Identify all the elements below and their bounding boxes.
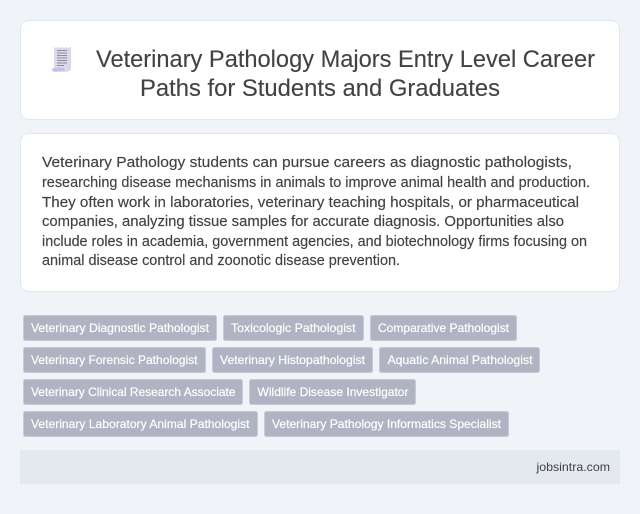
tag: Veterinary Clinical Research Associate: Veterinary Clinical Research Associate: [31, 385, 236, 399]
tag: Veterinary Diagnostic Pathologist: [24, 316, 216, 340]
tag: Wildlife Disease Investigator: [250, 380, 416, 404]
description text: Veterinary Pathology students can pursue careers as diagnostic pathologists,: [42, 155, 572, 171]
tag: Toxicologic Pathologist: [224, 316, 364, 340]
tag: Veterinary Histopathologist: [212, 348, 372, 372]
description text: companies, analyzing tissue samples for accurate diagnosis. Opportunities also: [42, 214, 564, 230]
title text: Paths for Students and Graduates: [140, 75, 500, 102]
tag: Veterinary Pathology Informatics Specialist: Veterinary Pathology Informatics Specialist: [272, 417, 502, 431]
tag: Veterinary Clinical Research Associate: [24, 380, 242, 404]
description text: animal disease control and zoonotic disease prevention.: [42, 253, 400, 269]
footer source text: jobsintra.com: [535, 460, 610, 474]
tag: Aquatic Animal Pathologist: [380, 348, 540, 372]
panel: title: [20, 20, 620, 120]
tag: Veterinary Forensic Pathologist: Veterinary Forensic Pathologist: [31, 353, 198, 367]
tag: Wildlife Disease Investigator: Wildlife Disease Investigator: [258, 385, 408, 399]
tag list: [24, 316, 540, 436]
description text: researching disease mechanisms in animals to improve animal health and production.: [42, 175, 590, 191]
tag: Veterinary Diagnostic Pathologist: Veterinary Diagnostic Pathologist: [31, 321, 210, 335]
tag: Veterinary Laboratory Animal Pathologist: [24, 412, 258, 436]
footer bar: [20, 450, 620, 484]
description text: include roles in academia, government agencies, and biotechnology firms focusing on: [42, 234, 587, 250]
title text: [96, 46, 595, 102]
panel: description: [20, 134, 620, 292]
tag: Veterinary Forensic Pathologist: [24, 348, 206, 372]
tag: Veterinary Histopathologist: Veterinary Histopathologist: [220, 353, 366, 367]
tag: Comparative Pathologist: Comparative Pathologist: [378, 321, 510, 335]
title text: Veterinary Pathology Majors Entry Level Career: [96, 46, 595, 73]
icon: document scroll: [52, 47, 71, 72]
tag: Veterinary Laboratory Animal Pathologist: Veterinary Laboratory Animal Pathologist: [31, 417, 250, 431]
tag: Aquatic Animal Pathologist: Aquatic Animal Pathologist: [388, 353, 533, 367]
tag: Toxicologic Pathologist: Toxicologic Pathologist: [231, 321, 356, 335]
description text: They often work in laboratories, veterinary teaching hospitals, or pharmaceutical: [42, 195, 579, 211]
description text: [42, 155, 590, 269]
tag: Comparative Pathologist: [370, 316, 516, 340]
tag: Veterinary Pathology Informatics Specialist: [264, 412, 508, 436]
